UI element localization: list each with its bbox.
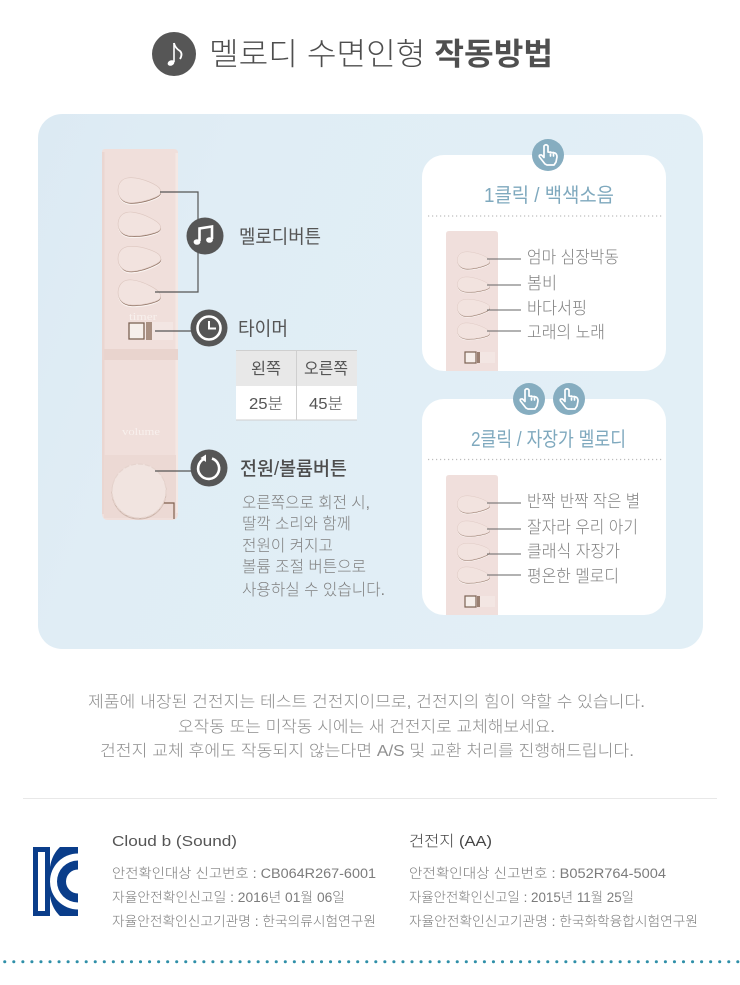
connector: power [155,470,192,472]
connector: melody buttons [155,192,198,292]
label: power volume button: 전원/볼륨버튼 [240,458,347,480]
icon: melody [186,218,224,254]
panel: how to use [38,114,703,649]
battery notice: 건전지 교체 후에도 작동되지 않는다면 A/S 및 교환 처리를 진행해드립니다. [100,742,634,760]
melody list: 잘자라 우리 아기 [527,518,638,537]
label: melody button: 멜로디버튼 [239,226,321,248]
certification: battery AA: 안전확인대상 신고번호 : B052R764-5004 [409,866,667,881]
melody list: 바다서핑 [527,299,587,318]
certification: Cloud b sound [112,833,376,929]
faint label: timer: timer [129,312,158,323]
power description: 딸깍 소리와 함께 [242,515,351,533]
melody list: 클래식 자장가 [527,542,620,561]
power description: 전원이 켜지고 [242,537,333,555]
timer table: 25분 [249,396,283,413]
timer table: 45분 [309,396,343,413]
certification: Cloud b sound: 안전확인대상 신고번호 : CB064R267-6001 [112,866,376,881]
timer table: 왼쪽 [251,360,281,378]
certification: battery AA: 건전지 (AA) [409,833,492,850]
battery notice: 제품에 내장된 건전지는 테스트 건전지이므로, 건전지의 힘이 약할 수 있습니다. [88,693,645,711]
certification: battery AA: 자율안전확인신고일 : 2015년 11월 25일 [409,890,634,905]
power description: 사용하실 수 있습니다. [242,581,385,599]
battery notice [88,693,645,760]
connector: timer [155,330,192,332]
icon: KC mark [33,846,78,917]
card heading: 1클릭 / 백색소음 [484,184,614,207]
icon: one click hand [532,139,564,171]
melody list [527,248,619,342]
card: one click white noise [422,139,666,371]
volume knob [112,464,174,519]
melody list: 봄비 [527,274,557,293]
melody list [527,492,640,586]
icon: music note [152,32,196,76]
melody list: 반짝 반짝 작은 별 [527,492,640,511]
icon: timer [190,310,228,346]
melody list: 엄마 심장박동 [527,248,619,267]
timer table [236,350,357,420]
power description: 오른쪽으로 회전 시, [242,494,370,512]
melody list: 평온한 멜로디 [527,567,619,586]
certification: Cloud b sound: 자율안전확인신고기관명 : 한국의류시험연구원 [112,914,376,929]
melody list: 고래의 노래 [527,323,605,342]
title text: 멜로디 수면인형 작동방법 [209,37,553,72]
card heading: 2클릭 / 자장가 멜로디 [471,428,626,451]
certification: battery AA: 자율안전확인신고기관명 : 한국화학융합시험연구원 [409,914,698,929]
icon: two click hands [513,383,585,415]
timer table: 오른쪽 [304,360,348,378]
certification: Cloud b sound: Cloud b (Sound) [112,833,237,850]
faint label: volume: volume [122,426,160,438]
mini remote [446,231,498,371]
card: two clicks lullaby [422,383,666,615]
title [152,32,553,76]
certification: Cloud b sound: 자율안전확인신고일 : 2016년 01월 06일 [112,890,345,905]
remote: large product image [102,149,178,520]
mini remote [446,475,498,615]
battery notice: 오작동 또는 미작동 시에는 새 건전지로 교체해보세요. [178,718,555,736]
power description: 볼륨 조절 버튼으로 [242,558,366,576]
certification: battery AA [409,833,698,929]
icon: power volume [190,450,228,486]
power description [242,494,385,599]
label: timer: 타이머 [238,318,288,340]
